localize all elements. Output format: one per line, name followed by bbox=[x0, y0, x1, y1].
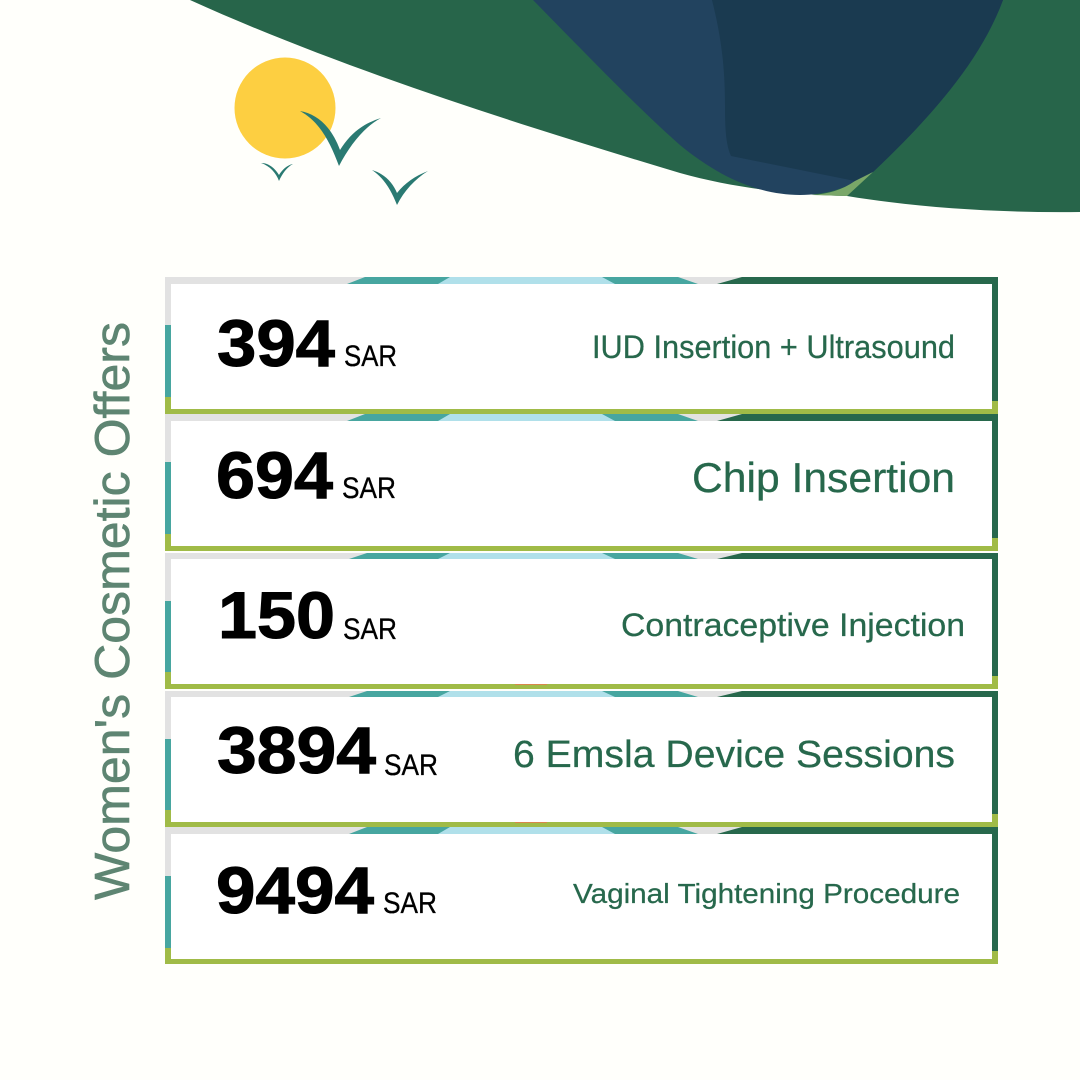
price: 3894 bbox=[217, 713, 376, 787]
offer name: Chip Insertion bbox=[692, 454, 955, 501]
offer name: Vaginal Tightening Procedure bbox=[573, 878, 960, 909]
offer card: 6 Emsla Device Sessions bbox=[165, 691, 998, 827]
offer name: 6 Emsla Device Sessions bbox=[513, 734, 955, 776]
offer name: Contraceptive Injection bbox=[621, 607, 965, 643]
currency: SAR bbox=[383, 887, 437, 920]
price: 394 bbox=[217, 306, 335, 380]
price: 694 bbox=[216, 438, 333, 512]
offer card: Chip Insertion bbox=[165, 414, 998, 551]
icon: small bird bbox=[261, 163, 293, 181]
offer name: IUD Insertion + Ultrasound bbox=[592, 329, 955, 365]
offer card: Vaginal Tightening Procedure bbox=[165, 827, 998, 964]
currency: SAR bbox=[384, 749, 438, 782]
price: 150 bbox=[218, 578, 335, 652]
price: 9494 bbox=[216, 853, 374, 927]
offer card: IUD Insertion + Ultrasound bbox=[165, 277, 998, 414]
vertical title: Women's Cosmetic Offers bbox=[86, 322, 140, 900]
currency: SAR bbox=[342, 472, 396, 505]
icon: large bird bbox=[300, 111, 381, 166]
green wave bbox=[190, 0, 1080, 212]
icon: medium bird bbox=[372, 170, 428, 205]
icon: sun bbox=[234, 58, 336, 158]
currency: SAR bbox=[343, 613, 397, 646]
dark blue overlap bbox=[712, 0, 1003, 181]
offer card: Contraceptive Injection bbox=[165, 553, 998, 689]
currency: SAR bbox=[344, 340, 397, 373]
decorative header: green and blue waves bbox=[190, 0, 1080, 212]
blue wave bbox=[533, 0, 1003, 195]
light green sliver bbox=[812, 172, 873, 196]
